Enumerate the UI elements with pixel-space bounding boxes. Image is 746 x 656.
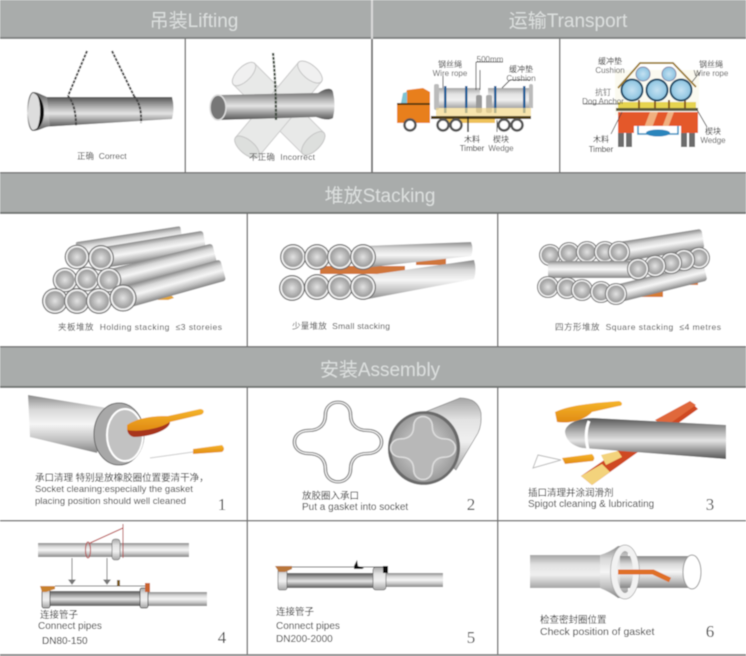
step 3 text xyxy=(528,487,654,510)
pipe stack xyxy=(42,226,226,314)
panel: holding stacking xyxy=(42,226,226,332)
step 5 text: 连接管子 xyxy=(276,606,315,618)
truck labels: Cushion xyxy=(506,74,536,83)
panel: step 1 socket cleaning xyxy=(28,395,226,514)
step 6 text: 检查密封圈位置 xyxy=(540,614,607,626)
section header: Lifting xyxy=(0,0,371,39)
step 2 text: 放胶圈入承口 xyxy=(302,490,359,502)
step 3 text: 插口清理并涂润滑剂 xyxy=(528,487,614,499)
timber supports xyxy=(640,278,698,297)
section header: Transport: 运输Transport xyxy=(509,10,628,32)
leader lines xyxy=(443,62,530,132)
lower pipe with clamps xyxy=(40,580,207,608)
gasket ring xyxy=(294,402,382,482)
truck wheels xyxy=(404,120,522,130)
rear view labels: Timber xyxy=(589,145,614,154)
section header: Assembly xyxy=(0,347,746,388)
rear view labels: 楔块 xyxy=(705,126,721,136)
panel: step 4 connect DN80-150 xyxy=(38,524,227,647)
step 2 text xyxy=(302,490,408,513)
step 2 text: Put a gasket into socket xyxy=(302,502,408,513)
scraper tool xyxy=(533,454,594,468)
panel: square stacking xyxy=(537,229,721,332)
brush xyxy=(555,401,622,423)
main pipe xyxy=(210,89,334,120)
truck labels: 500mm xyxy=(477,55,504,64)
panel: lifting correct xyxy=(27,51,174,161)
small tool xyxy=(150,445,224,458)
step 4 text: 连接管子 xyxy=(40,609,79,621)
timber supports xyxy=(320,258,446,274)
pipe stack xyxy=(279,242,476,301)
step number 2: 2 xyxy=(467,495,475,514)
cushion and timber layers xyxy=(616,100,698,111)
wooden beams xyxy=(581,401,698,485)
pipe stack xyxy=(537,229,710,305)
truck labels: 缓冲垫 xyxy=(509,64,533,74)
truck cab and bed xyxy=(397,88,531,123)
pipe with sockets xyxy=(275,560,443,590)
section header: Stacking: 堆放Stacking xyxy=(325,185,435,207)
pipes, rear view xyxy=(622,67,692,100)
step 1 text: Socket cleaning:especially the gasket xyxy=(35,484,193,495)
section header: Lifting: 吊装Lifting xyxy=(150,10,238,32)
section header: Assembly: 安装Assembly xyxy=(320,359,441,381)
step number 5: 5 xyxy=(467,628,475,647)
caption: square stacking: 四方形堆放 Square stacking ≤4 metres xyxy=(555,322,721,332)
pipe with socket xyxy=(27,92,174,131)
truck labels: 钢丝绳 xyxy=(438,59,462,69)
rear view labels: 钢丝绳 xyxy=(699,59,723,69)
caption: incorrect: 不正确 Incorrect xyxy=(249,152,316,162)
panel: step 5 connect DN200-2000 xyxy=(275,560,475,647)
pipes on truck xyxy=(434,84,533,113)
rope xyxy=(273,53,276,120)
step 5 text xyxy=(276,606,340,645)
lifting rope xyxy=(68,51,141,126)
rear view labels: Wire rope xyxy=(694,69,729,78)
panel: rear view transport xyxy=(582,56,729,154)
pipe with gasket xyxy=(380,398,481,493)
pipe and socket xyxy=(530,545,701,599)
rear view labels: Wedge xyxy=(700,136,726,145)
step number 3: 3 xyxy=(706,495,714,514)
step 1 text xyxy=(35,472,209,507)
rear view labels: Cushion xyxy=(595,66,625,75)
rear view leader lines xyxy=(583,72,707,134)
upper pipe xyxy=(38,539,189,560)
step 4 text xyxy=(38,609,102,647)
section header: Stacking xyxy=(0,173,746,214)
step 4 text: Connect pipes xyxy=(38,621,102,632)
panel: lifting incorrect xyxy=(210,53,334,162)
rear view labels: 缓冲垫 xyxy=(598,56,622,66)
step 1 text: 承口清理 特别是放橡胶圈位置要清干净， xyxy=(35,472,209,484)
step 3 text: Spigot cleaning & lubricating xyxy=(528,499,654,510)
truck labels: Wedge xyxy=(488,144,514,153)
arrows xyxy=(69,558,110,584)
panel: step 3 spigot xyxy=(528,401,726,514)
wire rope frame xyxy=(618,63,696,88)
panel: truck transport xyxy=(397,55,536,153)
truck labels: Timber xyxy=(460,144,485,153)
step 1 text: placing position should well cleaned xyxy=(35,496,186,507)
section header: Transport xyxy=(373,0,746,39)
rear view labels: Dog Anchor xyxy=(582,97,624,106)
truck labels: 楔块 xyxy=(493,134,509,144)
rear view labels: 抗钉 xyxy=(595,87,611,97)
truck labels: Wire rope xyxy=(433,69,468,78)
pipe socket xyxy=(28,395,144,465)
step 5 text: Connect pipes xyxy=(276,621,340,632)
step 6 text xyxy=(540,614,654,638)
pale background xyxy=(615,70,699,115)
red rope xyxy=(86,524,123,558)
rear view labels xyxy=(582,56,729,154)
ghost pipes xyxy=(228,57,329,162)
truck labels xyxy=(433,55,536,153)
panel: small stacking xyxy=(279,242,476,331)
rear view labels: 木料 xyxy=(593,134,609,144)
step number 1: 1 xyxy=(218,495,226,514)
gasket mark xyxy=(618,572,670,580)
caption: small stacking: 少量堆放 Small stacking xyxy=(292,321,390,331)
step 4 text: DN80-150 xyxy=(42,636,88,647)
trailer body xyxy=(618,112,698,147)
timber support xyxy=(158,296,174,300)
panel: step 6 check gasket xyxy=(530,545,714,641)
brush xyxy=(127,409,204,437)
step number 6: 6 xyxy=(706,622,714,641)
step 6 text: Check position of gasket xyxy=(540,626,654,638)
step number 4: 4 xyxy=(218,628,227,647)
panel: step 2 gasket xyxy=(294,398,481,514)
step 5 text: DN200-2000 xyxy=(276,634,333,645)
spigot pipe xyxy=(565,418,726,459)
caption: correct: 正确 Correct xyxy=(77,151,127,161)
truck labels: 木料 xyxy=(464,134,480,144)
caption: holding stacking: 夹板堆放 Holding stacking ≤3 storeies xyxy=(58,322,222,332)
